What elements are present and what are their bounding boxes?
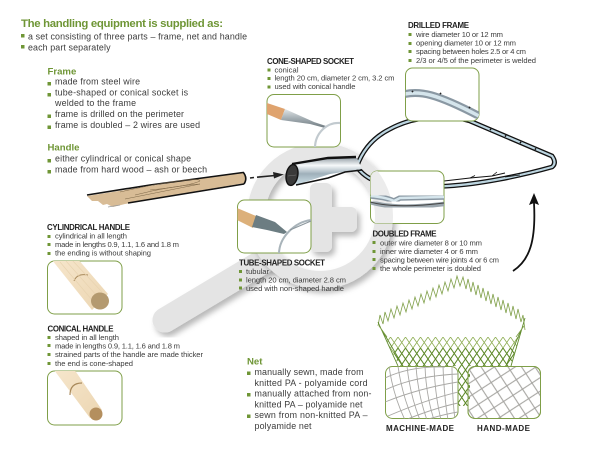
frame illustration [357,117,554,187]
net text block: sewn from non-knitted PA – [254,410,368,420]
net text block: knitted PA – polyamide net [254,400,363,410]
cone-shaped socket text: length 20 cm, diameter 2 cm, 3.2 cm [274,74,394,82]
cone-shaped socket text: conical [274,66,299,74]
supply options list: a set consisting of three parts – frame, net and handle [28,32,247,42]
net text block: polyamide net [254,421,312,431]
supply options list [21,32,247,52]
tube-shaped socket text: TUBE-SHAPED SOCKET [239,258,325,268]
net text block: knitted PA - polyamide cord [254,378,368,388]
doubled frame text: outer wire diameter 8 or 10 mm [380,238,482,248]
cone-shaped socket text: CONE-SHAPED SOCKET [267,57,354,66]
net type labels: MACHINE-MADE [386,424,455,433]
net type labels: HAND-MADE [477,424,531,433]
curved arrow: net to frame [513,193,539,271]
cylindrical handle text: the ending is without shaping [55,248,151,258]
wooden handle illustration [87,172,246,207]
frame text block: frame is drilled on the perimeter [55,109,184,119]
doubled frame text [372,230,499,273]
frame text block: tube-shaped or conical socket is [55,88,189,98]
panel: machine-made net [385,366,458,420]
handle text block: Handle [48,142,80,154]
drilled frame text: DRILLED FRAME [408,21,469,30]
arrow: handle into socket [250,172,284,178]
drilled frame text: wire diameter 10 or 12 mm [415,30,503,39]
conical handle text: the end is cone-shaped [55,359,133,368]
doubled frame text: the whole perimeter is doubled [380,264,481,273]
panel: drilled frame [405,68,479,121]
panel: cylindrical handle photo [48,258,122,314]
net text block: Net [247,356,263,368]
tube-shaped socket text: tubular [246,267,269,276]
panel: tube-shaped socket [237,200,311,254]
net text block: manually sewn, made from [254,367,364,377]
supply options list: each part separately [28,42,111,52]
net text block [247,356,372,431]
tube-shaped socket text: used with non-shaped handle [246,284,344,293]
cylindrical handle text: CYLINDRICAL HANDLE [47,223,130,232]
frame text block: welded to the frame [54,98,136,108]
net illustration [378,276,525,406]
handle text block [48,142,207,174]
title: The handling equipment is supplied as: [21,18,223,30]
drilled frame text [408,21,536,65]
handle text block: either cylindrical or conical shape [55,154,191,164]
tube-shaped socket text: length 20 cm, diameter 2.8 cm [246,276,346,284]
handle text block: made from hard wood – ash or beech [55,164,207,174]
frame text block: made from steel wire [55,76,140,86]
cylindrical handle text: cylindrical in all length [55,232,127,240]
doubled frame text: spacing between wire joints 4 or 6 cm [380,256,499,264]
frame text block: frame is doubled – 2 wires are used [55,120,200,130]
panel: cone-shaped socket [267,94,340,148]
cylindrical handle text [47,223,179,258]
conical handle text [48,324,203,368]
cylindrical handle text: made in lengths 0.9, 1.1, 1.6 and 1.8 m [55,240,179,249]
conical handle text: made in lengths 0.9, 1.1, 1.6 and 1.8 m [55,342,180,350]
panel: doubled frame [370,170,444,224]
drilled frame text: opening diameter 10 or 12 mm [416,38,516,48]
drilled frame text: spacing between holes 2.5 or 4 cm [416,47,526,56]
conical handle text: shaped in all length [55,333,119,342]
frame text block [48,66,200,130]
panel: hand-made net [468,366,540,418]
frame text block: Frame [48,66,76,78]
conical handle text: strained parts of the handle are made thicker [55,350,203,359]
panel: conical handle photo [48,369,122,425]
socket illustration [284,157,362,186]
cone-shaped socket text [267,57,394,91]
doubled frame text: DOUBLED FRAME [372,230,436,238]
drilled frame text: 2/3 or 4/5 of the perimeter is welded [416,56,536,65]
tube-shaped socket text [239,258,346,293]
cone-shaped socket text: used with conical handle [274,82,356,91]
conical handle text: CONICAL HANDLE [48,324,114,334]
net type labels [386,424,531,433]
watermark: magnifier with plus [165,152,384,320]
net text block: manually attached from non- [254,388,372,398]
doubled frame text: inner wire diameter 4 or 6 mm [380,247,478,256]
